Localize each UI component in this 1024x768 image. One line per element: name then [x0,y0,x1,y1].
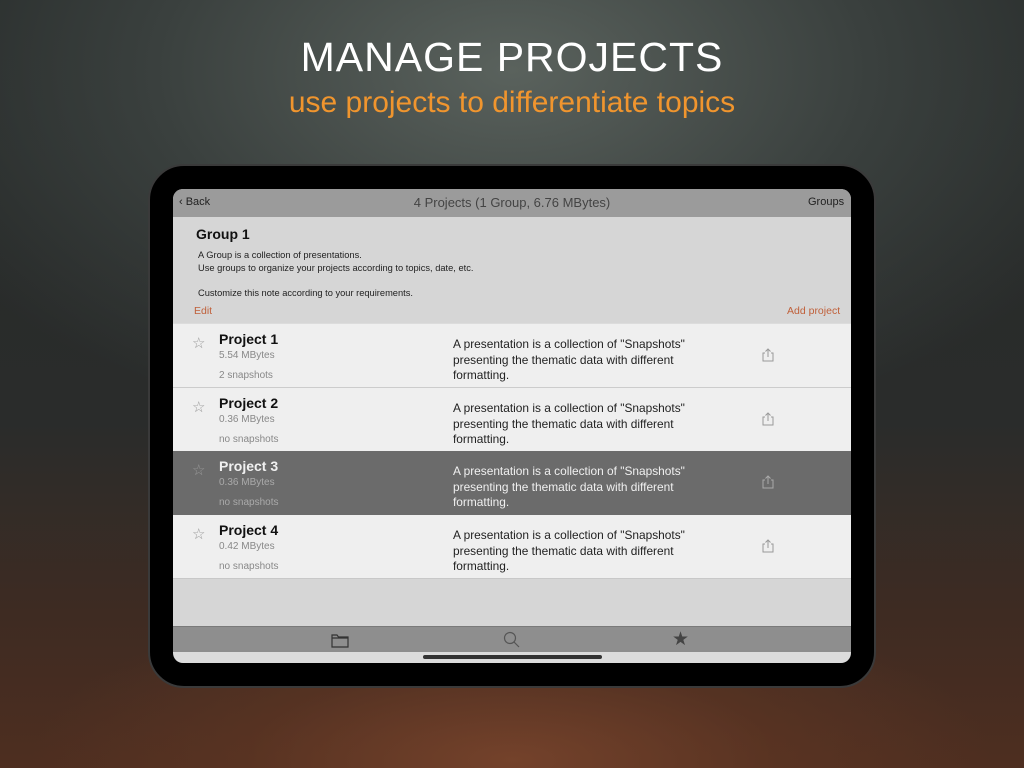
group header: Edit [194,305,212,317]
group header: Customize this note according to your requirements. [198,288,413,298]
group header [173,217,851,323]
row: project 2: 0.36 MBytes [219,414,275,425]
row: project 2: ☆ [192,399,205,416]
row: project 4: no snapshots [219,561,278,572]
row: project 1: A presentation is a collection of "Snapshots" presenting the thematic data with different formatting. [453,337,685,382]
row: project 3 selected: A presentation is a collection of "Snapshots" presenting the thematic data with different formatting. [453,464,685,509]
row: project 4: ☆ [192,526,205,543]
row: project 3 selected [173,451,851,515]
row: project 3 selected: 0.36 MBytes [219,477,275,488]
icon: star: ★ [672,629,689,650]
screen [173,189,851,663]
row: project 4: Project 4 [219,522,278,538]
nav bar: ‹ Back [179,196,210,208]
row: project 1: Project 1 [219,331,278,347]
group header: Add project [787,305,840,317]
home indicator [423,655,602,659]
subtitle: use projects to differentiate topics [289,86,735,119]
row: project 2: A presentation is a collection of "Snapshots" presenting the thematic data with different formatting. [453,401,685,446]
group header: Group 1 [196,226,250,242]
nav bar: Groups [808,196,844,208]
row: project 3 selected: no snapshots [219,497,278,508]
group header: Use groups to organize your projects according to topics, date, etc. [198,262,473,272]
row: project 2 [173,388,851,452]
row: project 1: 2 snapshots [219,370,273,381]
empty area [173,579,851,626]
title: MANAGE PROJECTS [301,34,723,80]
row: project 1: 5.54 MBytes [219,350,275,361]
row: project 4: A presentation is a collection of "Snapshots" presenting the thematic data with different formatting. [453,528,685,573]
tab bar [173,626,851,652]
row: project 4 [173,515,851,579]
row: project 4: 0.42 MBytes [219,541,275,552]
nav bar: 4 Projects (1 Group, 6.76 MBytes) [414,195,610,210]
row: project 1: ☆ [192,335,205,352]
tablet device [148,164,876,688]
row: project 3 selected: ☆ [192,462,205,479]
row: project 2: Project 2 [219,395,278,411]
icon: folder [331,634,349,648]
nav bar [173,189,851,217]
row: project 1 [173,324,851,388]
group header: A Group is a collection of presentations. [198,250,362,260]
row: project 3 selected: Project 3 [219,458,278,474]
icon: search [504,632,520,648]
row: project 2: no snapshots [219,434,278,445]
